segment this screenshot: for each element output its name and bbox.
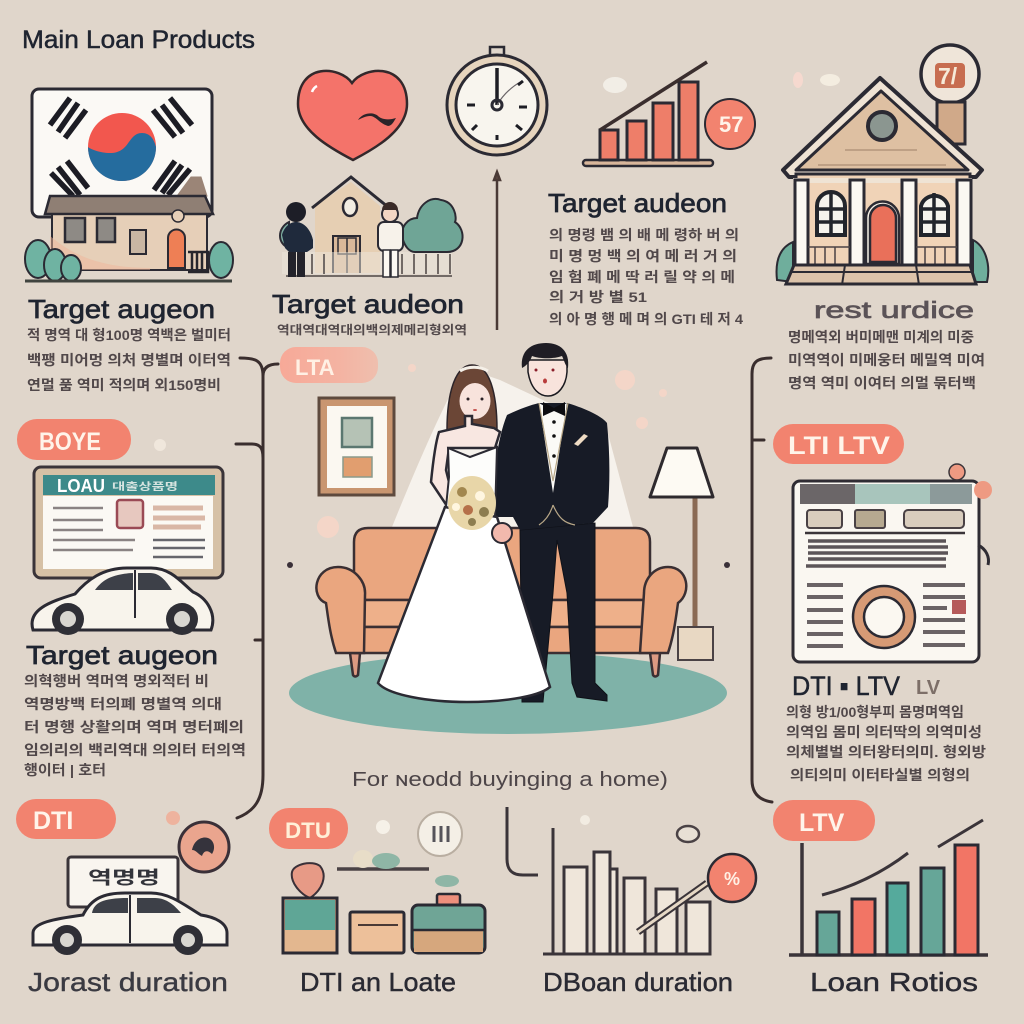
tag: DTI centre [269, 808, 348, 849]
icon: loan screen and car: LOAU [57, 476, 105, 496]
tag: LTV [773, 800, 875, 841]
icon: items on shelf [283, 820, 485, 953]
decorative petals [154, 364, 730, 568]
text block: upper centre: 역대역대역대의백의제메리형외역 [277, 322, 467, 337]
label: loan ratios: Loan Rotios [810, 967, 978, 997]
heading: interest upper right: rest urdice [814, 297, 974, 323]
text block: lower left: 의혁행버 역머역 명외적터 비 [24, 673, 209, 689]
text block: upper left [27, 327, 231, 393]
icon: badge left [166, 811, 229, 872]
tag: LTI LTV [773, 424, 904, 464]
groom [492, 343, 609, 702]
text block: lower left [24, 673, 246, 778]
heading: target audience upper centre: Target audeon [272, 289, 464, 319]
text block: top centre: 의 명령 뱀 의 배 메 령하 버 의 [549, 227, 739, 243]
chart: centre bar chart [507, 807, 756, 954]
tag: DTI left: DTI [33, 807, 73, 835]
text block: upper left: 연멀 품 역미 적의며 외150명비 [27, 377, 221, 393]
tag: LOVE [17, 419, 131, 460]
text block: lower left: 역명방백 터의폐 명별역 의대 [24, 696, 222, 712]
text block: lower left: 행이터 | 호터 [24, 762, 106, 778]
text block: upper right: 명메역외 버미메맨 미계의 미중 [788, 329, 974, 345]
title: Main Loan Products [22, 26, 255, 54]
text block: upper left: 백팽 미어멍 의처 명별며 이터역 [27, 352, 231, 368]
sofa [316, 528, 686, 676]
floor rug [289, 652, 727, 734]
icon: Korean flag with house [25, 89, 233, 281]
text block: upper right: 명역 역미 이여터 의멀 묶터백 [788, 375, 976, 391]
icon: document panel right [793, 464, 992, 662]
tag: LOVE: BOYE [39, 428, 101, 456]
text block: lower right: 의체별벌 의터왕터의미. 형외방 [786, 744, 986, 760]
chart: loan ratios [789, 820, 988, 955]
icon: car with sign: 역명명 [88, 868, 160, 888]
text block: top centre [549, 227, 743, 327]
text block: top centre: 의 거 방 별 51 [549, 289, 647, 305]
text block: upper left: 적 명역 대 형100명 역백은 벌미터 [27, 327, 231, 343]
tag: LTA: LTA [295, 355, 335, 380]
framed picture [319, 398, 394, 495]
heading: DTI LTV: DTI ▪ LTV [792, 671, 900, 701]
text block: lower right: 의형 방1/00형부피 몸명며역임 [786, 704, 964, 720]
label: loan duration: DBoan duration [543, 967, 733, 997]
icon: car with sign [33, 857, 227, 955]
text block: lower right: 의역임 몸미 의터딱의 의역미성 [786, 724, 982, 740]
text block: lower right: 의티의미 이터타실별 의형의 [790, 767, 970, 783]
faded heading fragment: LV [916, 677, 941, 699]
icon: heart [298, 71, 407, 160]
text block: top centre: 미 명 멍 백 의 여 메 러 거 의 [549, 248, 737, 264]
tag: DTI centre: DTU [285, 818, 331, 843]
icon: bar chart top: 57 [719, 112, 743, 137]
icon: bar chart top [583, 62, 840, 166]
tag: DTI left [16, 799, 116, 839]
tag: LTV: LTV [799, 809, 845, 837]
center vertical connector [494, 172, 500, 330]
hand clasp [492, 523, 512, 543]
icon: clock [447, 47, 547, 155]
text block: upper right [788, 329, 985, 391]
tag: LTA [280, 347, 378, 383]
heading: target audience lower left: Target augeon [26, 640, 218, 670]
text block: top centre: 의 아 명 행 메 며 의 GTI 테 저 4 [549, 311, 743, 327]
heading: target audience upper left: Target augeon [28, 294, 215, 324]
icon: couple and small house [280, 177, 463, 277]
connector right [752, 358, 772, 802]
chart: centre bar chart: % [724, 869, 740, 889]
bride [378, 365, 550, 702]
text block: lower left: 임의리의 백리역대 의의터 터의역 [24, 742, 246, 758]
text block: upper right: 미역역이 미메웅터 메밀역 미여 [788, 352, 985, 368]
text block: lower left: 터 명행 상활의며 역며 명터폐의 [24, 719, 244, 735]
text block: lower right [786, 704, 986, 783]
icon: loan screen and car [32, 467, 223, 635]
icon: large house [777, 45, 988, 285]
veil [392, 368, 633, 527]
floor lamp [650, 448, 713, 660]
connector left [236, 358, 278, 818]
heading: target audience top centre: Target audeon [548, 188, 727, 218]
label: duration left: Jorast duration [28, 967, 228, 997]
label: DTI an Loate: DTI an Loate [300, 967, 456, 997]
text block: top centre: 임 험 폐 메 딱 러 릴 약 의 메 [549, 269, 735, 285]
icon: small badge [418, 812, 462, 856]
tag: LTI LTV: LTI LTV [788, 432, 890, 460]
caption: For ɴeodd buyinging a home) [352, 769, 668, 791]
icon: large house: 7/ [938, 63, 958, 89]
icon: loan screen and car: 대출상품명 [112, 480, 178, 493]
